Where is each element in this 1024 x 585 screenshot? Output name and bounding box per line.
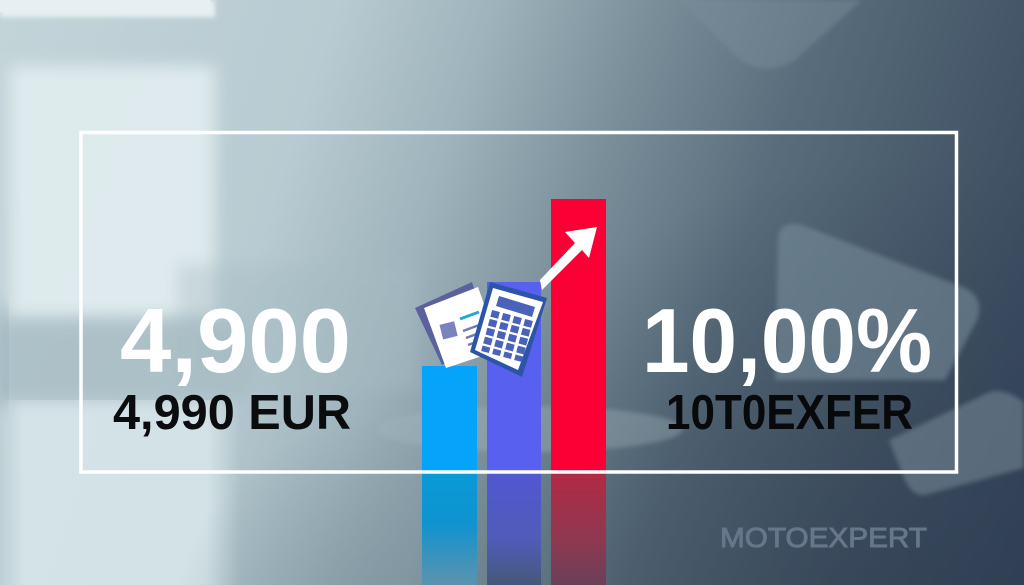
- bar: red: [551, 199, 606, 472]
- icon: calculator: [470, 282, 547, 377]
- bar reflections: [422, 472, 606, 585]
- background shape: play triangle: [775, 224, 979, 380]
- watermark: MOTOEXPERT: [720, 522, 927, 553]
- right label: 10T0EXFER: [666, 386, 913, 440]
- bar: purple: [487, 282, 541, 472]
- background shape: lower right: [889, 391, 1024, 495]
- bar chart: [422, 199, 606, 585]
- background shape: top triangle: [680, 0, 862, 69]
- background shape: ellipse behind bars: [377, 406, 683, 452]
- left label: 4,990 EUR: [113, 386, 351, 440]
- icon: arrow: [540, 227, 597, 290]
- left value: 4,900: [120, 291, 351, 392]
- bar: blue: [422, 366, 477, 472]
- right value: 10,00%: [642, 291, 932, 392]
- icon: documents: [415, 282, 500, 368]
- frame: [81, 132, 956, 472]
